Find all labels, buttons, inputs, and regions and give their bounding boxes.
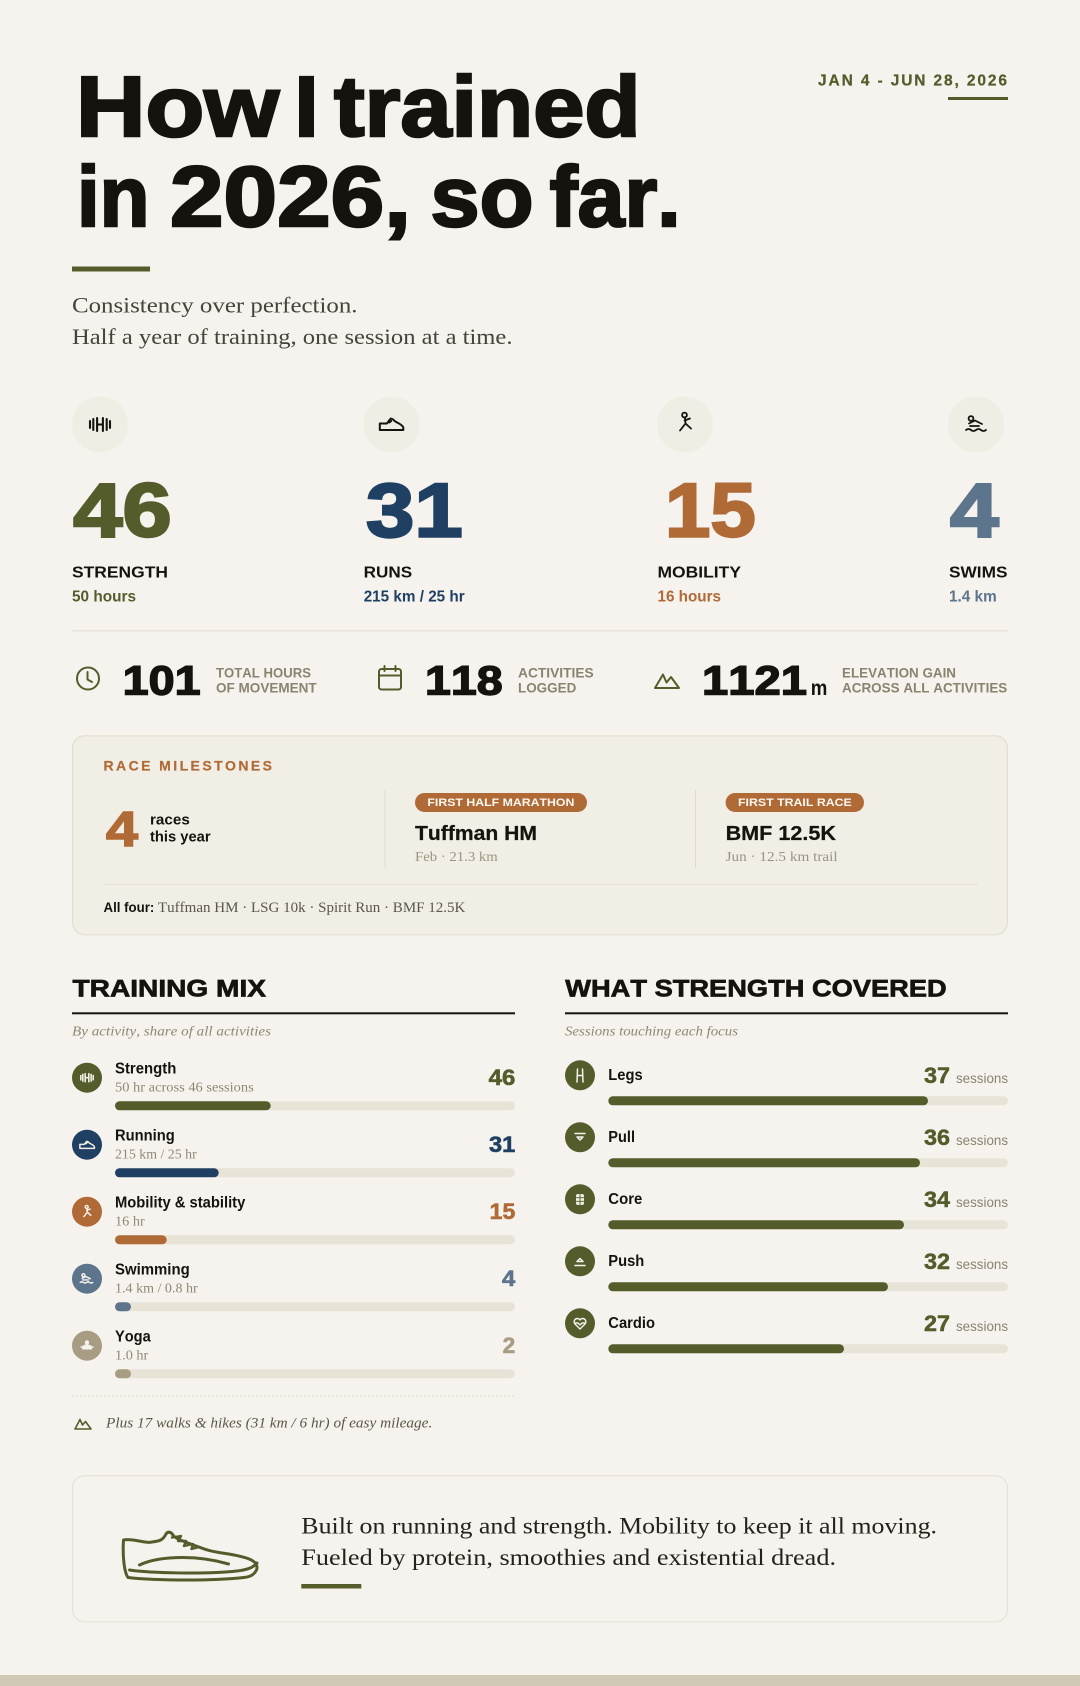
title: so: [430, 150, 534, 245]
race: Tuffman HM: Tuffman HM: [415, 822, 537, 845]
row: core: Core: [608, 1191, 642, 1208]
stat: strength: [72, 396, 172, 605]
title rule: [72, 266, 150, 272]
row: push: 32: [924, 1249, 950, 1274]
panel: closing note: [73, 1476, 1007, 1622]
row: swimming: [72, 1262, 516, 1311]
panel: race milestones: [73, 736, 1007, 935]
icon: running shoe: [123, 1532, 257, 1580]
footer band: [0, 1675, 1080, 1686]
row: cardio: sessions: [956, 1318, 1008, 1334]
title: far.: [550, 150, 681, 245]
totals: activities: ACTIVITIES: [518, 664, 594, 680]
row: yoga: 2: [503, 1333, 515, 1358]
row: yoga: 1.0 hr: [115, 1347, 149, 1362]
totals: hours: OF MOVEMENT: [216, 680, 317, 696]
row: legs: [565, 1060, 1008, 1105]
icon: swimmer: [948, 396, 1004, 452]
all four races: All four:: [104, 899, 154, 915]
race: BMF 12.5K: BMF 12.5K: [726, 822, 836, 845]
stat: mobility: 16 hours: [658, 588, 721, 605]
row: cardio: 27: [924, 1311, 950, 1336]
row: mobility: 15: [490, 1199, 515, 1224]
race count: races: [150, 811, 190, 828]
row: push: sessions: [956, 1256, 1008, 1272]
row: pull: 36: [924, 1125, 950, 1150]
row: cardio: [565, 1308, 1008, 1353]
race: Tuffman HM: FIRST HALF MARATHON: [427, 797, 574, 809]
totals: elevation: ACROSS ALL ACTIVITIES: [842, 680, 1007, 696]
title: 2026,: [170, 150, 411, 245]
stat: runs: 215 km / 25 hr: [364, 588, 465, 605]
race: BMF 12.5K: [726, 793, 864, 865]
stat: swims: SWIMS: [949, 565, 1008, 582]
heading: training mix: [72, 976, 515, 1039]
stat: swims: [948, 396, 1008, 605]
title: How: [76, 60, 280, 155]
row: swimming: 4: [502, 1266, 516, 1291]
totals: activities: 118: [425, 658, 503, 704]
row: running: 31: [489, 1132, 515, 1157]
race: Tuffman HM: [415, 793, 587, 865]
row: legs: sessions: [956, 1070, 1008, 1086]
race count: [106, 803, 211, 857]
stat: strength: 46: [73, 468, 172, 554]
title: in: [77, 150, 150, 245]
totals: hours: [77, 658, 317, 704]
race: BMF 12.5K: FIRST TRAIL RACE: [738, 797, 852, 809]
closing text: Fueled by protein, smoothies and existential dread.: [301, 1545, 836, 1571]
stat: runs: 31: [366, 468, 463, 554]
icon: dumbbell: [72, 396, 128, 452]
icon: clock: [77, 668, 99, 690]
totals: activities: [379, 658, 594, 704]
stat: runs: RUNS: [364, 565, 413, 582]
row: legs: 37: [924, 1063, 950, 1088]
totals: elevation: 1121: [702, 658, 807, 704]
heading: what strength covered: WHAT STRENGTH COVERED: [565, 976, 947, 1002]
row: strength: Strength: [115, 1061, 176, 1078]
note: walks and hikes: Plus 17 walks & hikes (31 km / 6 hr) of easy mileage.: [105, 1415, 432, 1431]
row: push: Push: [608, 1253, 644, 1270]
row: cardio: Cardio: [608, 1315, 655, 1332]
row: push: [565, 1246, 1008, 1291]
row: yoga: Yoga: [115, 1329, 151, 1346]
stat: mobility: 15: [665, 468, 756, 554]
race count: 4: [106, 803, 138, 857]
totals: elevation: ELEVATION GAIN: [842, 664, 956, 680]
row: swimming: 1.4 km / 0.8 hr: [115, 1280, 198, 1295]
totals: elevation: m: [811, 677, 827, 700]
race: BMF 12.5K: Jun · 12.5 km trail: [726, 850, 838, 865]
row: pull: Pull: [608, 1129, 635, 1146]
stat: swims: 1.4 km: [949, 588, 997, 605]
stat: swims: 4: [950, 468, 999, 554]
race: Tuffman HM: Feb · 21.3 km: [415, 850, 498, 865]
heading: training mix: By activity, share of all activities: [72, 1024, 272, 1039]
row: strength: 46: [489, 1065, 515, 1090]
row: core: sessions: [956, 1194, 1008, 1210]
row: strength: 50 hr across 46 sessions: [115, 1079, 254, 1094]
panel: training mix: [72, 976, 516, 1431]
stat: strength: 50 hours: [72, 588, 136, 605]
subtitle: Half a year of training, one session at a time.: [72, 324, 512, 349]
heading: what strength covered: [565, 976, 1008, 1039]
date range: JAN 4 - JUN 28, 2026: [818, 72, 1007, 89]
title: [76, 60, 681, 245]
heading: race milestones: RACE MILESTONES: [104, 758, 272, 774]
row: mobility: [72, 1195, 515, 1244]
row: yoga: [72, 1329, 515, 1378]
row: strength: [72, 1061, 515, 1110]
row: running: 215 km / 25 hr: [115, 1146, 197, 1161]
totals: activities: LOGGED: [518, 680, 576, 696]
totals: elevation: [655, 658, 1007, 704]
totals: hours: TOTAL HOURS: [216, 664, 311, 680]
stat: mobility: MOBILITY: [658, 565, 741, 582]
row: swimming: Swimming: [115, 1262, 190, 1279]
stat: runs: [364, 396, 465, 605]
race count: this year: [150, 829, 211, 846]
closing text: Built on running and strength. Mobility to keep it all moving.: [301, 1513, 937, 1539]
panel: what strength covered: [565, 976, 1008, 1353]
icon: mountain: [655, 674, 679, 688]
heading: training mix: TRAINING MIX: [72, 976, 267, 1002]
icon: shoe: [364, 396, 420, 452]
row: pull: sessions: [956, 1132, 1008, 1148]
stat: strength: STRENGTH: [72, 565, 168, 582]
totals: hours: 101: [123, 658, 201, 704]
row: core: [565, 1184, 1008, 1229]
row: running: Running: [115, 1128, 175, 1145]
heading: what strength covered: Sessions touching each focus: [565, 1024, 739, 1039]
closing text: [301, 1513, 937, 1588]
row: mobility: Mobility & stability: [115, 1195, 246, 1212]
stat: mobility: [657, 396, 756, 605]
title: I: [294, 60, 318, 155]
title: trained: [334, 60, 640, 155]
icon: figure: [657, 396, 713, 452]
all four races: Tuffman HM · LSG 10k · Spirit Run · BMF 12.5K: [158, 900, 466, 916]
icon: calendar: [379, 666, 401, 690]
date range: [818, 72, 1008, 100]
row: core: 34: [924, 1187, 951, 1212]
row: running: [72, 1128, 515, 1177]
row: pull: [565, 1122, 1008, 1167]
row: legs: Legs: [608, 1067, 643, 1084]
row: mobility: 16 hr: [115, 1213, 145, 1228]
subtitle: Consistency over perfection.: [72, 293, 358, 318]
subtitle: [72, 293, 512, 349]
